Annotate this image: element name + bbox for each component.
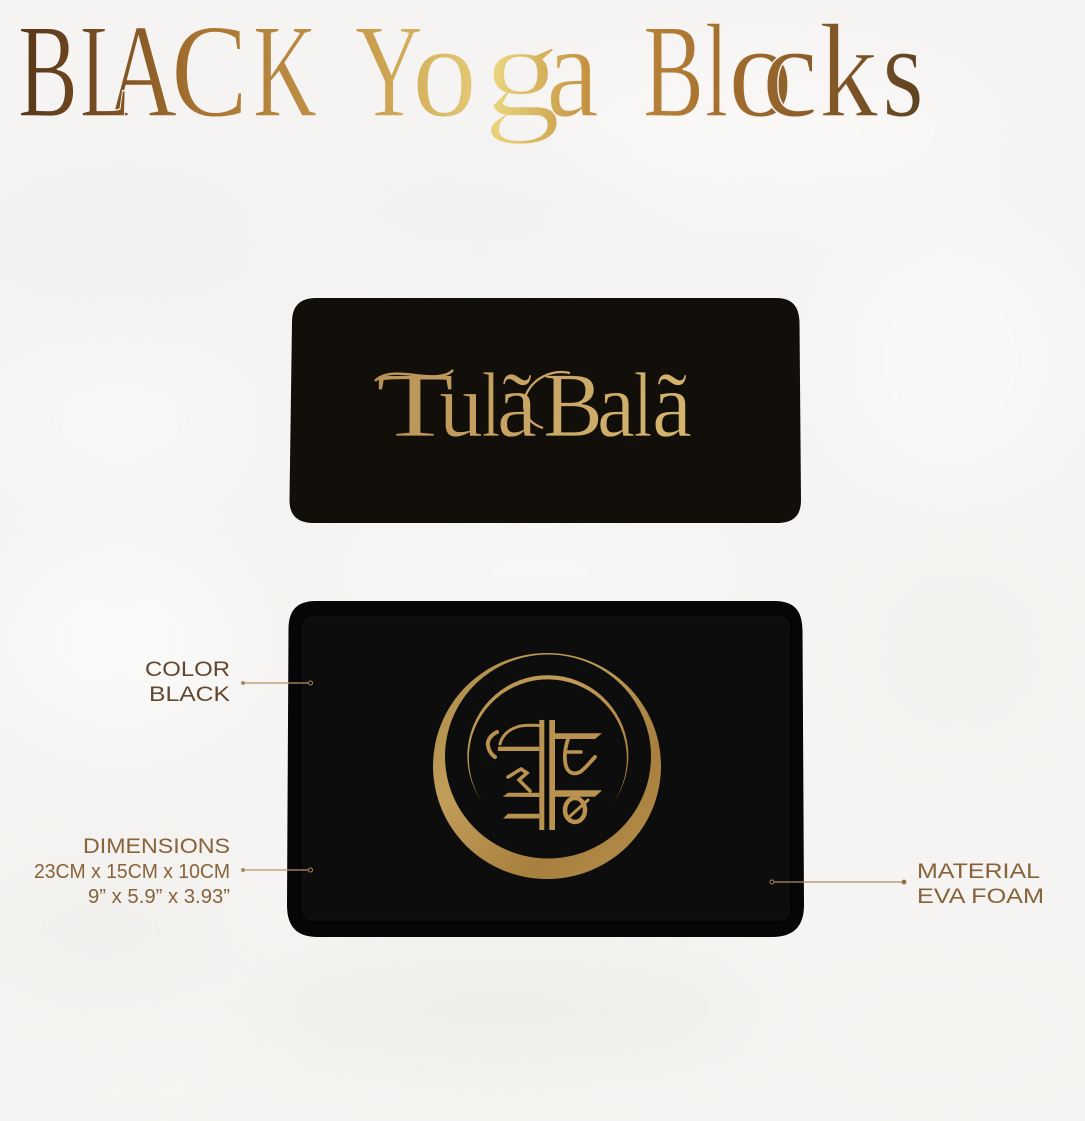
leader line [770,880,906,884]
label: COLOR [145,658,230,681]
inner panel [302,616,790,921]
vertical bars [539,720,544,830]
left upper glyph [500,725,539,744]
title: o [728,0,793,145]
crescent ring [433,653,661,879]
symbol [498,720,602,830]
title: s [882,0,924,145]
title: C [171,0,248,145]
label [145,658,230,706]
inner arc [467,675,628,803]
title: l [705,0,728,145]
title: k [819,0,878,145]
logo: TulaBala: l [634,354,652,456]
block body [290,298,801,523]
title: A [106,0,177,145]
logo: TulaBala: ã [652,354,692,456]
label [34,835,230,908]
title: K [253,0,317,145]
label: EVA FOAM [917,885,1044,908]
callout: color [145,658,312,706]
yoga block: emblem view [287,601,804,937]
right lower glyph [565,798,585,822]
title: Y [355,0,423,145]
title: L [80,0,130,145]
label [917,860,1044,908]
logo: TulaBala [375,354,692,456]
callout: material [770,860,1044,908]
logo: TulaBala: a [597,354,635,456]
logo: TulaBala: ã [497,354,537,456]
label: MATERIAL [917,860,1040,883]
title [18,0,924,145]
leader line [241,681,312,685]
leader line [241,868,312,872]
title: B [643,0,704,145]
horizontal bars [555,733,602,739]
logo: TulaBala: B [543,354,603,456]
label: 9” x 5.9” x 3.93” [88,886,230,908]
title: B [18,0,78,145]
logo: TulaBala: T [376,354,454,456]
label: DIMENSIONS [83,835,230,858]
block body [287,601,804,937]
title: c [762,0,818,145]
title: g [483,0,561,145]
left middle glyph [508,769,530,791]
label: BLACK [149,683,230,706]
title: a [546,0,599,145]
logo: TulaBala: u [439,354,483,456]
label: 23CM x 15CM x 10CM [34,861,230,883]
right upper glyph [565,739,595,773]
logo: TulaBala: l [482,354,500,456]
yoga block: top view [290,298,801,523]
callout: dimensions [34,835,312,908]
emblem [433,653,661,879]
title: o [412,0,477,145]
